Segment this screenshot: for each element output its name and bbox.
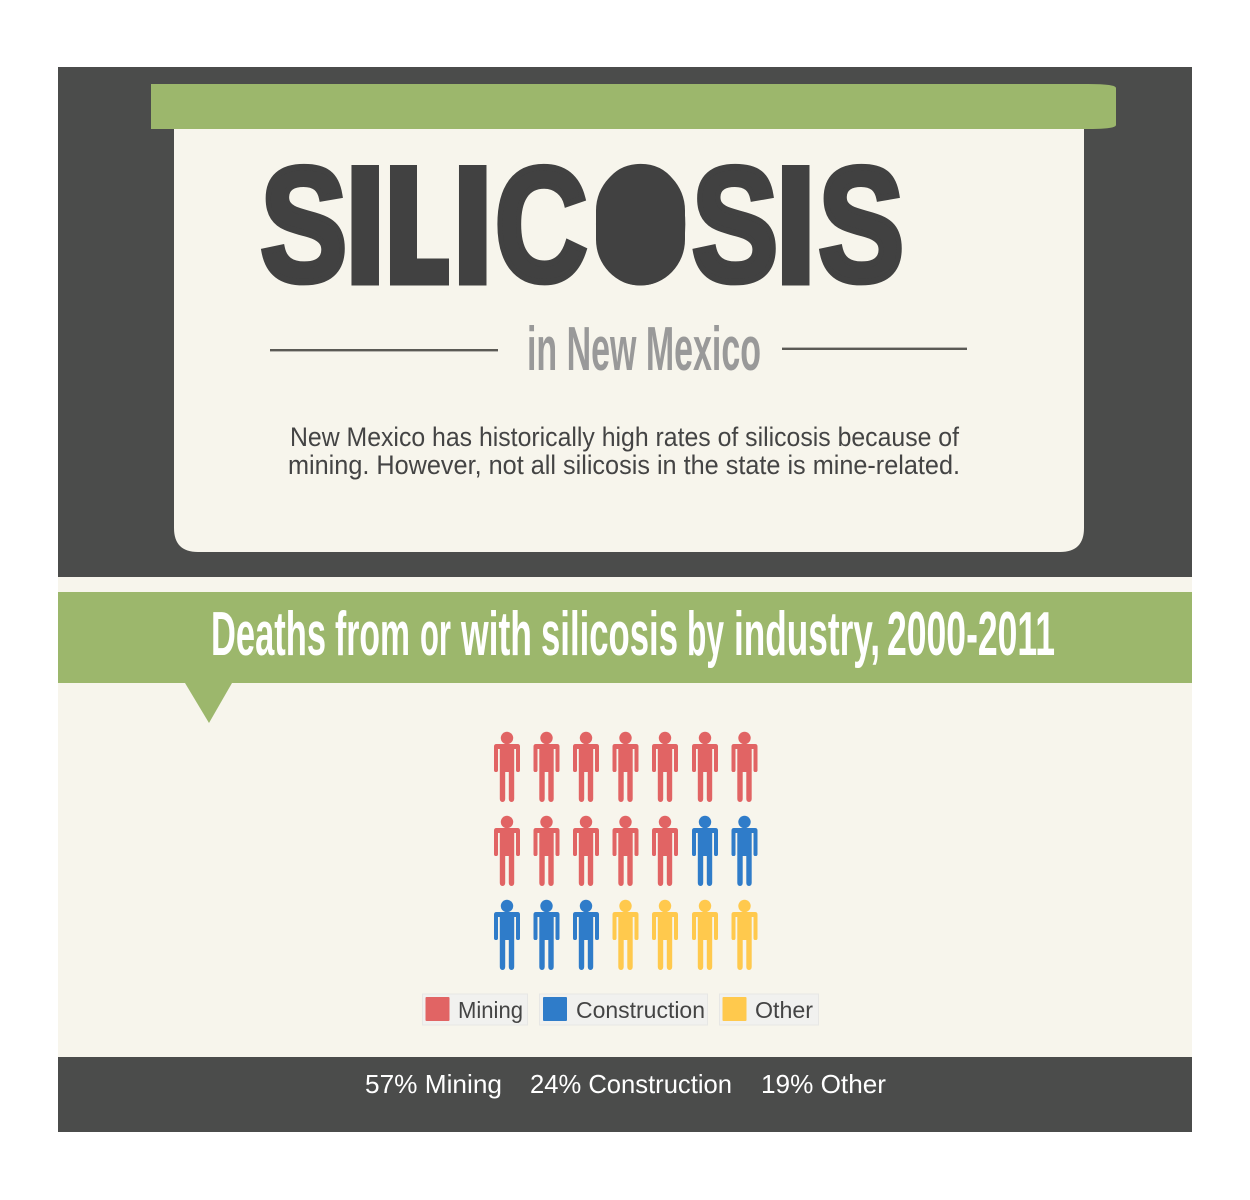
title: SILICOSIS: S [818, 134, 904, 316]
title: SILICOSIS: I [446, 127, 499, 323]
chart heading banner: by [687, 600, 724, 669]
title: SILICOSIS [260, 127, 904, 323]
title: SILICOSIS: I [339, 127, 392, 323]
legend: Construction [576, 997, 705, 1023]
pictogram chart: 21 people [494, 732, 758, 970]
intro text: New Mexico has historically high rates of silicosis because of [290, 422, 960, 452]
footer statistics bar [58, 1057, 1192, 1132]
legend: Mining [458, 997, 523, 1023]
title card [174, 129, 1084, 552]
chart heading banner [58, 592, 1192, 723]
title: SILICOSIS: S [260, 135, 347, 316]
chart heading banner: Deaths [211, 600, 326, 669]
title: SILICOSIS: L [382, 128, 453, 323]
chart heading banner: silicosis [541, 600, 678, 669]
legend [422, 994, 818, 1025]
chart section background [58, 577, 1192, 1057]
footer statistics bar: 24% Construction [530, 1069, 732, 1099]
subtitle: in New Mexico: in New Mexico [527, 315, 761, 384]
header panel background [58, 67, 1192, 577]
title: SILICOSIS: C [495, 134, 587, 316]
chart heading banner: from [335, 600, 410, 669]
footer statistics bar: 57% Mining [365, 1069, 502, 1099]
title: SILICOSIS: I [769, 127, 822, 323]
chart heading banner: with [460, 600, 532, 669]
legend: Other [755, 997, 813, 1023]
chart heading banner: or [420, 600, 451, 669]
title: SILICOSIS: O [591, 130, 691, 321]
title: SILICOSIS: S [692, 135, 778, 316]
chart heading banner: industry, [734, 600, 880, 669]
chart heading banner: 2000-2011 [887, 600, 1055, 669]
intro text [288, 422, 960, 480]
footer statistics bar: 19% Other [761, 1069, 886, 1099]
green top bar [151, 84, 1116, 129]
intro text: mining. However, not all silicosis in the state is mine-related. [288, 450, 960, 480]
